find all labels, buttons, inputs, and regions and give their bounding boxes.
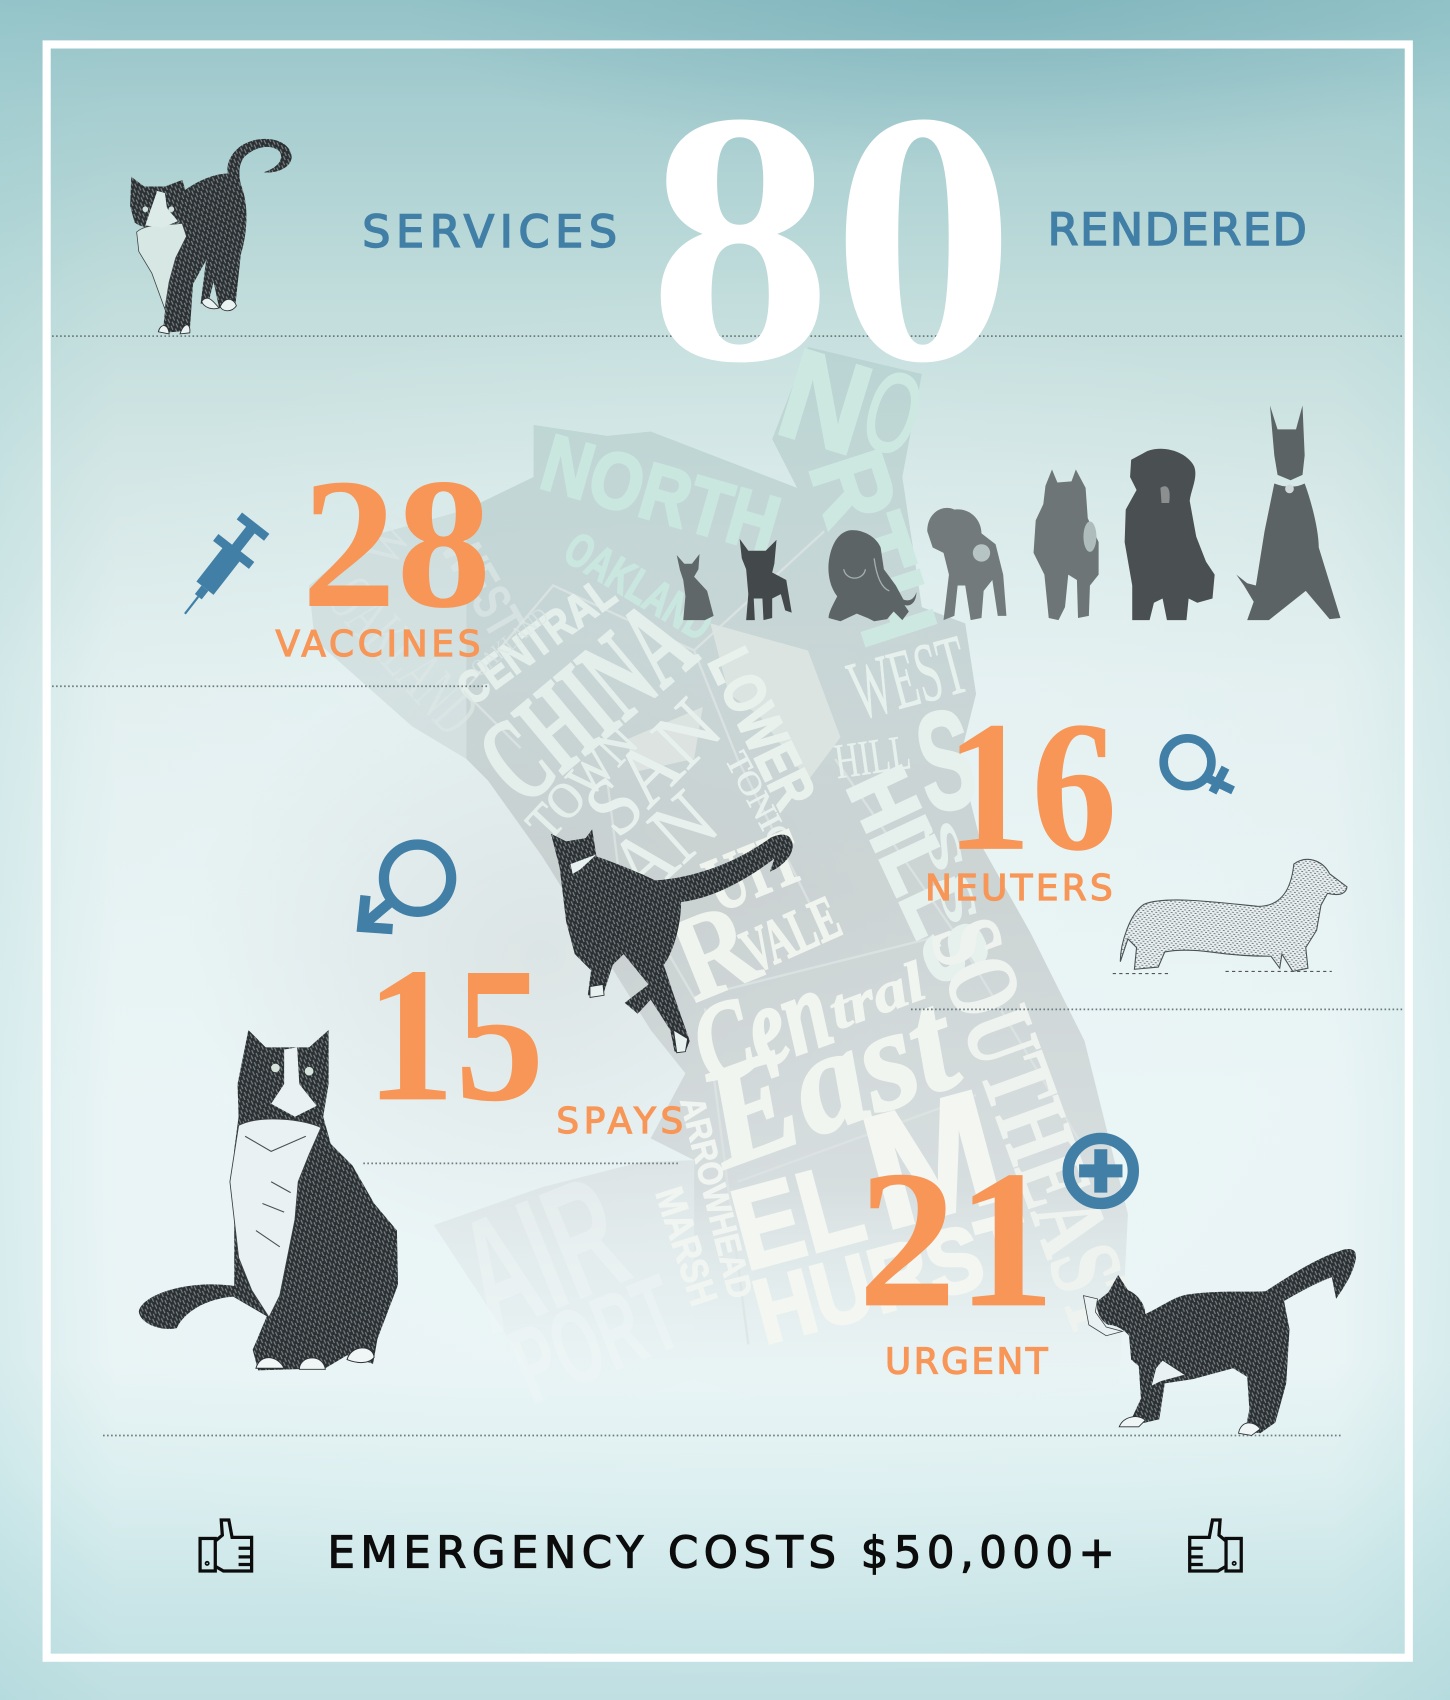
stat: 21 urgent bbox=[858, 1129, 1133, 1383]
icon: syringe bbox=[167, 509, 274, 628]
footer text: EMERGENCY COSTS $50,000+ bbox=[328, 1529, 1115, 1579]
map label: North Hills bbox=[764, 322, 960, 659]
map label: Fruitvale: VALE bbox=[731, 882, 851, 986]
map label: West Hills: WEST bbox=[840, 618, 977, 738]
map label: North Oakland bbox=[532, 418, 789, 652]
illustration: walking cat top left bbox=[130, 139, 292, 334]
map label: West Oakland: WE bbox=[356, 492, 435, 575]
stat: 16 neuters bbox=[925, 684, 1233, 909]
label neuters: NEUTERS bbox=[925, 868, 1113, 909]
icon: thumbs up right bbox=[1190, 1520, 1241, 1571]
map label: Chinatown and Central: CENTRAL bbox=[448, 567, 625, 715]
label spays: SPAYS bbox=[556, 1101, 683, 1142]
map label: San Antonio bbox=[567, 681, 800, 916]
map label: North Oakland: NORTH bbox=[532, 418, 789, 571]
map of neighbourhoods bbox=[184, 322, 1161, 1426]
map label: West Hills bbox=[830, 618, 1010, 995]
map label: San Antonio: TONIO bbox=[717, 746, 800, 858]
map label: North Hills: RTH bbox=[786, 437, 960, 659]
services word: SERVICES bbox=[362, 207, 617, 258]
illustration: dachshund bbox=[1113, 859, 1347, 974]
dog 3: basset bbox=[828, 530, 916, 621]
map label: San Antonio: AN bbox=[591, 772, 735, 916]
map label: West Hills: HILLS bbox=[830, 753, 1010, 995]
map label: West Oakland: WEST bbox=[429, 524, 535, 647]
number 15: 15 bbox=[365, 927, 544, 1141]
map label: West Hills: S bbox=[905, 678, 986, 843]
number 28: 28 bbox=[301, 441, 491, 647]
map label: Airport bbox=[436, 1141, 696, 1426]
dog 6: retriever bbox=[1125, 449, 1215, 620]
map label: Fruitvale: R bbox=[654, 875, 776, 1028]
illustration: cat from behind centre bbox=[551, 829, 793, 1053]
stat: 15 spays bbox=[362, 845, 683, 1142]
dog 5: pit bull bbox=[1034, 469, 1099, 620]
map label: Airport: PORT bbox=[495, 1251, 696, 1426]
map label: Elmhurst bbox=[719, 1056, 1042, 1364]
map label: Central East: East bbox=[679, 960, 978, 1199]
map label: West Oakland: OAKLAND bbox=[314, 562, 493, 749]
number 16: 16 bbox=[946, 684, 1117, 890]
dog size row bbox=[677, 405, 1340, 621]
title: services 80 rendered bbox=[362, 38, 1307, 437]
icon: plus circle bbox=[1068, 1138, 1133, 1203]
map label: Central East: tral bbox=[820, 950, 934, 1042]
map label: San Antonio: SAN bbox=[567, 681, 738, 853]
map label: West Oakland bbox=[314, 492, 554, 749]
map label: North Oakland: OAKLAND bbox=[555, 522, 722, 652]
map label: Arrowhead Marsh bbox=[646, 1093, 759, 1311]
map label: Central East: Cen bbox=[676, 947, 846, 1110]
map label: Fruitvale: UIT bbox=[692, 811, 815, 929]
divider lines bbox=[52, 336, 1402, 1435]
map label: Airport: AIR bbox=[436, 1141, 649, 1368]
map label: West Hills: HILL bbox=[831, 724, 914, 789]
map label: Lower Hills: LOWER bbox=[695, 639, 828, 818]
icon: mars symbol bbox=[362, 845, 451, 929]
map label: Arrowhead Marsh: MARSH bbox=[646, 1182, 725, 1311]
footer: emergency costs bbox=[200, 1520, 1241, 1579]
map label: Chinatown and Central bbox=[448, 567, 719, 851]
label vaccines: VACCINES bbox=[275, 624, 480, 665]
dog 4: spotted hound bbox=[927, 508, 1006, 620]
map label: Elmhurst: HURST bbox=[744, 1193, 1042, 1364]
map label: Elmhurst: M bbox=[846, 1056, 1019, 1264]
icon: thumbs up left bbox=[200, 1520, 252, 1571]
illustration: standing cat right bbox=[1083, 1249, 1356, 1435]
number 21: 21 bbox=[858, 1129, 1055, 1348]
map label: Chinatown and Central: TOWN bbox=[515, 714, 648, 851]
big number 80: 80 bbox=[649, 38, 1015, 437]
icon: venus symbol bbox=[1164, 738, 1233, 793]
stat: 28 vaccines bbox=[167, 441, 491, 665]
map label: Chinatown and Central: CHINA bbox=[454, 576, 719, 828]
map label: Fruitvale bbox=[654, 811, 851, 1028]
rendered word: RENDERED bbox=[1048, 205, 1307, 256]
map label: North Hills: N bbox=[764, 322, 887, 483]
dog 2: corgi bbox=[740, 539, 792, 620]
map label: West Hills: SS bbox=[912, 813, 990, 931]
illustration: sitting cat bbox=[139, 1030, 398, 1370]
map label: Arrowhead Marsh: ARROWHEAD bbox=[672, 1093, 759, 1302]
label urgent: URGENT bbox=[885, 1342, 1048, 1383]
map label: Elmhurst: EL bbox=[719, 1138, 876, 1295]
dog 1: chihuahua bbox=[677, 554, 714, 620]
map label: Southeast: SOUTHEAST bbox=[909, 904, 1161, 1350]
dog 7: great dane bbox=[1236, 405, 1340, 620]
map label: North Hills: O bbox=[850, 345, 936, 481]
map label: West Oakland: OAKLAND bbox=[466, 603, 554, 682]
